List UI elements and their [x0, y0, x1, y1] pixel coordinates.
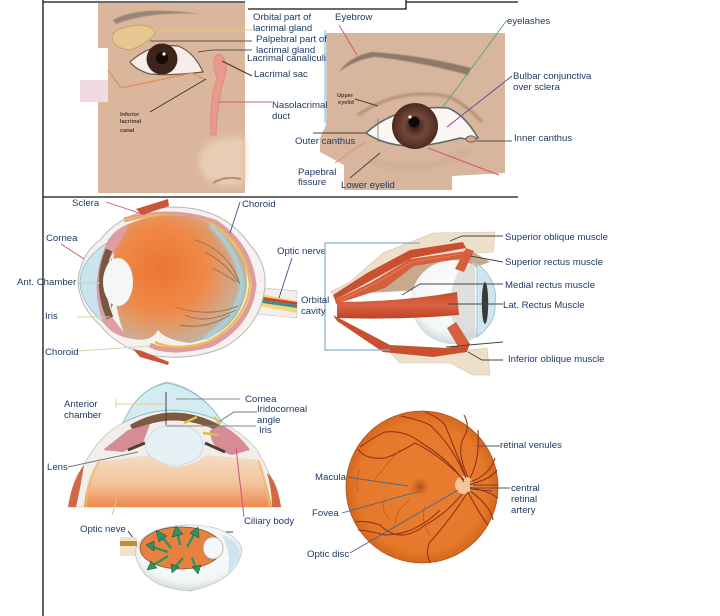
- labels: retina: retinal: [511, 494, 537, 505]
- muscle: superior oblique and rectus: [333, 242, 474, 304]
- icon: eye and iris: [366, 103, 478, 149]
- orbital cavity bracket: [325, 243, 420, 350]
- labels: eyeball: Optic nerve: [277, 246, 326, 257]
- labels: external eye: Papebral: [298, 167, 336, 178]
- lens: [145, 425, 203, 466]
- cornea: [123, 383, 222, 423]
- panel: external eye: [320, 30, 505, 190]
- leader lines: retina: [342, 446, 510, 553]
- choroid band: [124, 214, 254, 350]
- labels: eyeball: Choroid: [242, 199, 276, 210]
- icon: eyebrow: [113, 11, 200, 24]
- labels: external eye: eyelashes: [507, 16, 550, 27]
- eyelid crease: [358, 94, 482, 122]
- eyeball shell: [135, 525, 242, 591]
- eyeball outer: [78, 207, 265, 357]
- icon: eye: [130, 44, 203, 75]
- labels: lacrimal apparatus: Lacrimal sac: [254, 69, 308, 80]
- icon: optic nerve stub: [120, 537, 137, 556]
- labels: muscles: Superior oblique muscle: [505, 232, 608, 243]
- icon: lacrimal gland: [112, 25, 154, 50]
- side muscles: [68, 465, 84, 507]
- extraocular muscle stubs: [136, 199, 169, 215]
- labels: external eye: over sclera: [513, 82, 561, 93]
- labels: dome: Cornea: [245, 394, 277, 405]
- text: upper eyelid: [337, 93, 354, 106]
- labels: dome: Optic neve: [80, 524, 126, 535]
- ciliary body: [103, 424, 250, 455]
- vitreous: [84, 455, 272, 507]
- labels: dome: [47, 394, 307, 535]
- labels: retina: Optic disc: [307, 549, 349, 560]
- labels: lacrimal apparatus: Palpebral part of: [256, 34, 327, 45]
- lens: [203, 537, 223, 559]
- labels: eyeball: Ant. Chamber: [17, 277, 77, 288]
- text: inferior lacrimal canal: Inferior: [120, 112, 140, 118]
- labels: lacrimal apparatus: [247, 12, 327, 122]
- muscle: lateral rectus: [337, 292, 459, 319]
- labels: eyeball: [17, 198, 326, 358]
- labels: retina: Macula: [315, 472, 347, 483]
- leader lines: eyeball: [61, 202, 292, 351]
- labels: retina: [307, 440, 562, 560]
- leader lines: dome: [68, 392, 257, 542]
- icon: nose: [199, 137, 245, 186]
- labels: eyeball: Choroid: [45, 347, 79, 358]
- leader lines: external eye: [313, 20, 512, 178]
- inferior lacrimal canal outline: [108, 70, 204, 88]
- icons: pressure arrows: [150, 531, 197, 571]
- page frame lines: [43, 0, 518, 616]
- iris: [130, 412, 220, 431]
- labels: retina: central: [511, 483, 540, 494]
- labels: external eye: Eyebrow: [335, 12, 372, 23]
- labels: external eye: Lower eyelid: [341, 180, 395, 191]
- labels: retina: artery: [511, 505, 536, 516]
- labels: retina: retinal venules: [500, 440, 562, 451]
- leader lines: muscles: [402, 236, 503, 360]
- icon: optic nerve: [248, 287, 297, 318]
- lens: [103, 258, 133, 306]
- labels: external eye: fissure: [298, 177, 326, 188]
- labels: external eye: Outer canthus: [295, 136, 355, 147]
- labels: dome: Lens: [47, 462, 68, 473]
- chart: orbit and extraocular muscles: [325, 232, 496, 375]
- leader lines: face: [150, 30, 272, 112]
- cornea: [80, 243, 108, 326]
- vitreous: [114, 215, 247, 343]
- text: inferior lacrimal canal: canal: [120, 128, 135, 134]
- icon: eyebrow: [339, 52, 471, 75]
- labels: dome: chamber: [64, 410, 102, 421]
- chart: glaucoma pressure eyeball: [120, 525, 242, 591]
- labels: dome: Ciliary body: [244, 516, 294, 527]
- labels: muscles: Superior rectus muscle: [505, 257, 603, 268]
- labels: dome: Anterior: [64, 399, 98, 410]
- sclera dome: [68, 382, 281, 507]
- labels: dome: angle: [257, 415, 280, 426]
- chart: anterior segment dome: [68, 382, 281, 507]
- text: inferior lacrimal canal: lacrimal: [120, 119, 142, 125]
- iris and ciliary body: [97, 226, 128, 338]
- labels: external eye: [295, 12, 592, 191]
- labels: external eye: Bulbar conjunctiva: [513, 71, 592, 82]
- macula: [407, 474, 433, 500]
- labels: lacrimal apparatus: Nasolacrimal: [272, 100, 327, 111]
- angle highlights: [184, 417, 220, 435]
- labels: muscles: Lat. Rectus Muscle: [503, 300, 585, 311]
- labels: muscles: [301, 232, 608, 365]
- labels: dome: Iridocorneal: [257, 404, 307, 415]
- labels: lacrimal apparatus: lacrimal gland: [253, 23, 312, 34]
- labels: lacrimal apparatus: duct: [272, 111, 290, 122]
- brown orbit space: [367, 250, 490, 293]
- retinal vessels: [175, 240, 240, 326]
- retinal vessels: [355, 412, 498, 563]
- text: upper eyelid: eyelid: [338, 100, 354, 106]
- icon: nasolacrimal duct: [211, 54, 226, 135]
- icon: eyeball: [411, 260, 496, 344]
- labels: lacrimal apparatus: Lacrimal canaliculi: [247, 53, 326, 64]
- labels: retina: Fovea: [312, 508, 339, 519]
- chart: eyeball cross-section: [78, 199, 297, 365]
- labels: eyeball: Iris: [45, 311, 58, 322]
- muscle: inferior rectus and oblique: [333, 315, 470, 357]
- icon: orbital bones: [330, 232, 495, 375]
- labels: dome: Iris: [259, 425, 272, 436]
- labels: muscles: cavity: [301, 306, 326, 317]
- suspensory fibres: [128, 443, 225, 452]
- labels: lacrimal apparatus: lacrimal gland: [256, 45, 315, 56]
- labels: muscles: Medial rectus muscle: [505, 280, 595, 291]
- labels: muscles: Orbital: [301, 295, 329, 306]
- labels: eyeball: Sclera: [72, 198, 100, 209]
- text: upper eyelid: Upper: [337, 93, 354, 99]
- orange interior: [140, 527, 222, 569]
- text: inferior lacrimal canal: [120, 112, 142, 134]
- panel: lacrimal apparatus face: [80, 3, 245, 193]
- labels: muscles: Inferior oblique muscle: [508, 354, 605, 365]
- chart: retina fundus: [346, 411, 498, 563]
- labels: external eye: Inner canthus: [514, 133, 572, 144]
- optic disc: [455, 476, 473, 494]
- labels: lacrimal apparatus: Orbital part of: [253, 12, 311, 23]
- labels: eyeball: Cornea: [46, 233, 78, 244]
